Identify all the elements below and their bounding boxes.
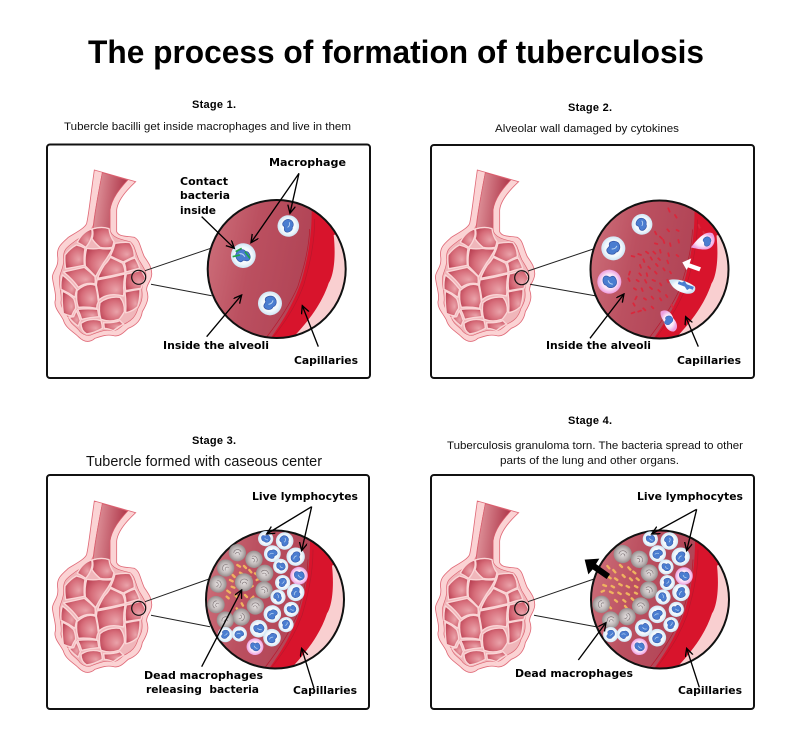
panel: stage 1 [47, 144, 370, 378]
alveolus illustration [435, 170, 535, 341]
caseous bacteria [227, 565, 259, 610]
alveolus illustration [435, 501, 535, 672]
label: contact bacteria inside: Contact [180, 175, 228, 188]
dead macrophages [204, 542, 277, 629]
magnified circle [208, 199, 357, 341]
white arrow [682, 258, 701, 271]
description: stage 4 [447, 440, 743, 467]
macrophages [202, 173, 318, 347]
panel: stage 4 [431, 475, 754, 709]
panel: stage 3 [47, 475, 369, 709]
label: inside the alveoli: Inside the alveoli [546, 339, 651, 352]
label: capillaries: Capillaries [677, 354, 741, 367]
zoom connector lines [145, 579, 210, 627]
zoom connector lines [528, 579, 596, 627]
magnifier ring [132, 601, 146, 615]
label: contact bacteria inside: inside [180, 204, 216, 217]
heading: stage 2: Stage 2. [568, 102, 612, 114]
label: contact bacteria inside [180, 175, 230, 217]
label: dead macrophages releasing bacteria: releasing bacteria [146, 683, 259, 696]
description: stage 4: Tuberculosis granuloma torn. The bacteria spread to other [447, 440, 743, 452]
label: inside the alveoli: Inside the alveoli [163, 339, 269, 352]
callout arrows [202, 173, 318, 347]
black rupture arrow [585, 559, 610, 579]
description: stage 1: Tubercle bacilli get inside macrophages and live in them [64, 121, 351, 133]
label: contact bacteria inside: bacteria [180, 189, 230, 202]
panel: stage 2 [431, 145, 754, 378]
label: capillaries: Capillaries [293, 684, 357, 697]
zoom connector lines [528, 249, 595, 296]
cells crossing the alveolar wall [660, 233, 715, 332]
bacteria spreading [628, 208, 704, 313]
magnified circle [206, 530, 355, 672]
label: capillaries: Capillaries [294, 354, 358, 367]
callout arrows [202, 507, 314, 688]
description: stage 3: Tubercle formed with caseous center [86, 454, 322, 470]
heading: stage 4: Stage 4. [568, 415, 612, 427]
label: live lymphocytes: Live lymphocytes [252, 490, 358, 503]
magnifier ring [132, 270, 146, 284]
title: The process of formation of tuberculosis [88, 34, 704, 70]
description: stage 4: parts of the lung and other organs. [500, 455, 679, 467]
zoom connector lines [145, 248, 212, 296]
magnifier ring [515, 601, 529, 615]
label: macrophage: Macrophage [269, 156, 346, 169]
magnified circle [591, 530, 740, 672]
live lymphocytes [603, 529, 694, 656]
heading: stage 1: Stage 1. [192, 99, 236, 111]
label: live lymphocytes: Live lymphocytes [637, 490, 743, 503]
dead macrophages [589, 542, 662, 629]
description: stage 2: Alveolar wall damaged by cytokines [495, 123, 680, 135]
macrophages in alveolus [595, 210, 657, 296]
alveolus illustration [52, 170, 152, 341]
magnified circle [590, 200, 740, 342]
label: dead macrophages: Dead macrophages [515, 667, 633, 680]
heading: stage 3: Stage 3. [192, 435, 236, 447]
callout arrows [578, 509, 699, 687]
label: dead macrophages releasing bacteria [144, 669, 263, 696]
magnifier ring [515, 271, 529, 285]
label: capillaries: Capillaries [678, 684, 742, 697]
label: dead macrophages releasing bacteria: Dead macrophages [144, 669, 263, 682]
caseous bacteria [602, 565, 639, 608]
callout arrows [590, 294, 698, 347]
live lymphocytes [218, 529, 309, 656]
alveolus illustration [52, 501, 152, 672]
